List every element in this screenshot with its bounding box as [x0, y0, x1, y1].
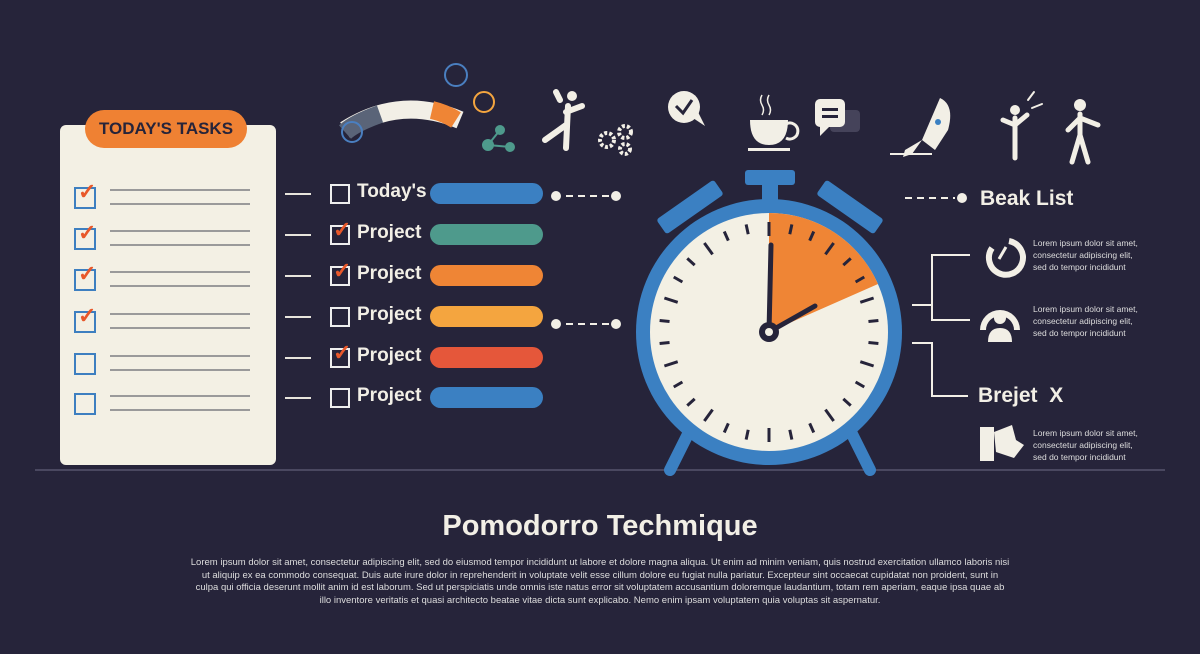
dotted connector 2	[551, 319, 621, 329]
row 3: Project	[357, 263, 421, 284]
icon: speech bubble	[815, 99, 860, 136]
text: item 2: sed do tempor incididunt	[1033, 328, 1126, 338]
title: Pomodorro Techmique	[442, 510, 758, 542]
icon: stopwatch	[989, 241, 1023, 275]
row 5: Project	[357, 345, 421, 366]
row 6: Project	[357, 385, 421, 406]
text: item 1	[1033, 238, 1138, 272]
tag: today's tasks: TODAY'S TASKS	[99, 119, 233, 138]
row 2: Project	[357, 222, 421, 243]
icon: rocket	[890, 98, 950, 157]
icon: coffee cup	[748, 95, 798, 151]
panel: task paper: ✓	[78, 220, 96, 245]
text: item 1: Lorem ipsum dolor sit amet,	[1033, 238, 1138, 248]
text: item 3: sed do tempor incididunt	[1033, 452, 1126, 462]
text: item 3	[1033, 428, 1138, 462]
row 5	[285, 340, 543, 368]
row 5: ✓	[333, 340, 351, 365]
row 2: ✓	[333, 217, 351, 242]
panel: task paper	[60, 125, 276, 465]
heading: beak list: Beak List	[980, 187, 1073, 210]
tag: today's tasks	[85, 110, 247, 148]
icon: people	[1003, 92, 1098, 162]
text: item 2: Lorem ipsum dolor sit amet,	[1033, 304, 1138, 314]
row 1: Today's	[357, 181, 427, 202]
icon: puzzle	[980, 425, 1024, 461]
dotted connector 1	[551, 191, 621, 201]
row 3	[285, 258, 543, 286]
tree connectors	[912, 255, 970, 396]
connector: beak list	[905, 193, 967, 203]
row 6	[285, 385, 543, 408]
icon: runner	[545, 91, 582, 148]
panel: task paper: ✓	[78, 303, 96, 328]
panel: task paper: ✓	[78, 179, 96, 204]
row 3: ✓	[333, 258, 351, 283]
baseline	[35, 469, 1165, 471]
paragraph: Lorem ipsum dolor sit amet, consectetur adipiscing elit, sed do eiusmod tempor incididunt ut labore et dolore magna aliqua. Ut enim ad minim veniam, quis nostrud exercitation ullamco laboris nisi ut aliquip ex ea commodo consequat. Duis aute irure dolor in reprehenderit in voluptate velit esse cillum dolore eu fugiat nulla pariatur. Excepteur sint occaecat cupidatat non proident, sunt in culpa qui officia deserunt mollit anim id est laborum. Sed ut perspiciatis unde omnis iste natus error sit voluptatem accusantium doloremque laudantium, totam rem aperiam, eaque ipsa quae ab illo inventore veritatis et quasi architecto beatae vitae dicta sunt explicabo. Nemo enim ipsam voluptatem quia voluptas sit aspernatur.	[191, 557, 1009, 606]
icon: check bubble	[668, 91, 705, 126]
row 1	[285, 181, 543, 204]
top icons	[342, 64, 514, 151]
text: item 3: Lorem ipsum dolor sit amet,	[1033, 428, 1138, 438]
text: item 2: consectetur adipiscing elit,	[1033, 316, 1133, 326]
row 2	[285, 217, 543, 245]
text: item 3: consectetur adipiscing elit,	[1033, 440, 1133, 450]
clock	[636, 170, 902, 470]
text: item 2	[1033, 304, 1138, 338]
text: item 1: sed do tempor incididunt	[1033, 262, 1126, 272]
icon: gears	[600, 126, 631, 154]
panel: task paper: ✓	[78, 261, 96, 286]
task rows	[285, 181, 543, 408]
icon: person	[980, 310, 1020, 342]
heading: brejet x: Brejet X	[978, 384, 1063, 407]
row 4: Project	[357, 304, 421, 325]
text: item 1: consectetur adipiscing elit,	[1033, 250, 1133, 260]
row 4	[285, 304, 543, 327]
